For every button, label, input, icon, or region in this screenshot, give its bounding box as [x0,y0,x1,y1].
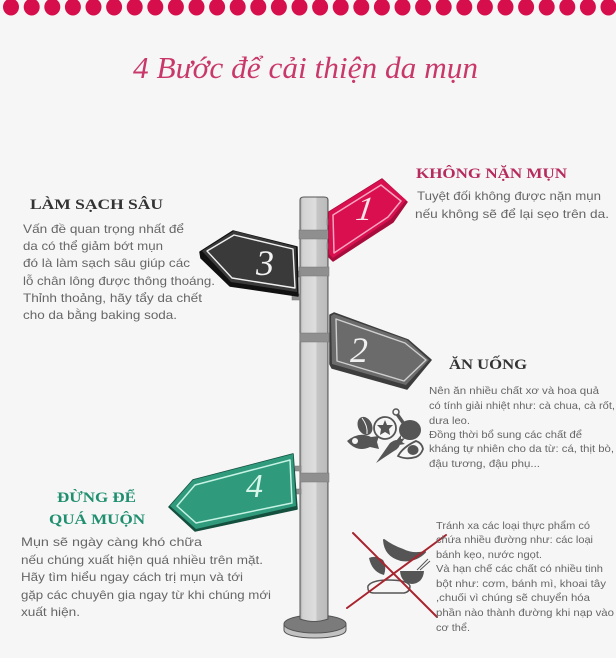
pole [300,197,328,622]
text: làm sạch sâu: Thỉnh thoảng, hãy tẩy da chết [23,291,203,305]
icon: fruit [369,557,385,575]
text: foods to avoid: ,chuối vì chúng sẽ chuyển hóa [436,592,590,604]
heading: đừng để quá muộn: ĐỪNG ĐỂ [57,488,136,506]
text: làm sạch sâu: đó là làm sạch sâu giúp các [23,256,190,270]
icon: bowl [400,571,424,584]
heading: ăn uống: ĂN UỐNG [449,355,527,373]
cross mark [347,533,446,617]
icon: healthy foods [347,409,423,463]
icon: steak [398,441,423,458]
signpost [169,179,431,638]
pole base [284,615,346,638]
decorative dotted border [0,0,616,16]
sign 2 [330,313,431,389]
text: ăn uống: dưa leo. [429,415,470,427]
text: foods to avoid: Và hạn chế các chất có nhiều tinh [436,563,603,575]
text: ăn uống [429,385,615,470]
text: ăn uống: có tính giải nhiệt như: cà chua, cà rốt, [429,400,615,412]
text: ăn uống: Nên ăn nhiều chất xơ và hoa quả [429,385,599,397]
heading: làm sạch sâu: LÀM SẠCH SÂU [30,196,163,213]
text: ăn uống: kháng tự nhiên cho da từ: cá, thịt bò, [429,443,614,455]
text: không nặn mụn: nếu không sẽ để lại sẹo trên da. [415,207,609,221]
text: làm sạch sâu: cho da bằng baking soda. [23,307,177,322]
icon: carrot [376,440,400,463]
text: đừng để quá muộn: nếu chúng xuất hiện quá nhiều trên mặt. [21,553,263,567]
text: ăn uống: đậu tương, đậu phụ... [429,458,540,470]
icon: tomato [374,417,396,439]
sign 3: 3 [255,243,274,283]
sign 2: 2 [350,330,368,370]
icon: coffee bean [355,414,375,438]
sign 1: 1 [350,190,380,228]
text: không nặn mụn: Tuyệt đối không được nặn mụn [417,189,601,203]
heading: không nặn mụn: KHÔNG NẶN MỤN [416,165,567,182]
icon: foods to avoid crossed out [347,533,446,617]
sign 4 [169,454,297,531]
icon: banana [384,540,425,560]
text: foods to avoid: bột như: cơm, bánh mì, khoai tây [436,578,607,590]
title: 4 Bước để cải thiện da mụn [133,50,478,85]
icon: bread [368,580,410,593]
text: foods to avoid [436,520,614,634]
text: làm sạch sâu: Vấn đề quan trọng nhất để [23,222,184,236]
text: foods to avoid: phần nào thành đường khi nạp vào [436,607,614,619]
text: làm sạch sâu: lỗ chân lông được thông thoáng. [23,273,215,288]
text: đừng để quá muộn: gặp các chuyên gia ngay từ khi chúng mới [21,588,271,602]
text: đừng để quá muộn [21,535,271,619]
text: làm sạch sâu [23,222,215,322]
icon: fish [347,435,379,449]
sign 1 [329,179,407,261]
text: foods to avoid: bánh kẹo, nước ngọt. [436,549,542,561]
text: làm sạch sâu: da có thể giảm bớt mụn [23,239,163,253]
text: không nặn mụn [415,189,609,221]
sign 4: 4 [246,468,263,505]
text: foods to avoid: cơ thể. [436,622,470,634]
text: đừng để quá muộn: Hãy tìm hiểu ngay cách trị mụn và tới [21,570,243,584]
icon: chicken leg [393,409,421,440]
sign 3 [200,231,298,296]
text: foods to avoid: Tránh xa các loại thực phẩm có [436,520,590,532]
heading: đừng để quá muộn [49,488,145,528]
text: đừng để quá muộn: Mụn sẽ ngày càng khó chữa [21,535,202,549]
pole clamps [292,219,335,494]
text: foods to avoid: chứa nhiều đường như: các loại [436,534,593,546]
text: đừng để quá muộn: xuất hiện. [21,605,80,619]
heading: đừng để quá muộn: QUÁ MUỘN [49,511,145,528]
text: ăn uống: Đồng thời bổ sung các chất để [429,429,582,441]
